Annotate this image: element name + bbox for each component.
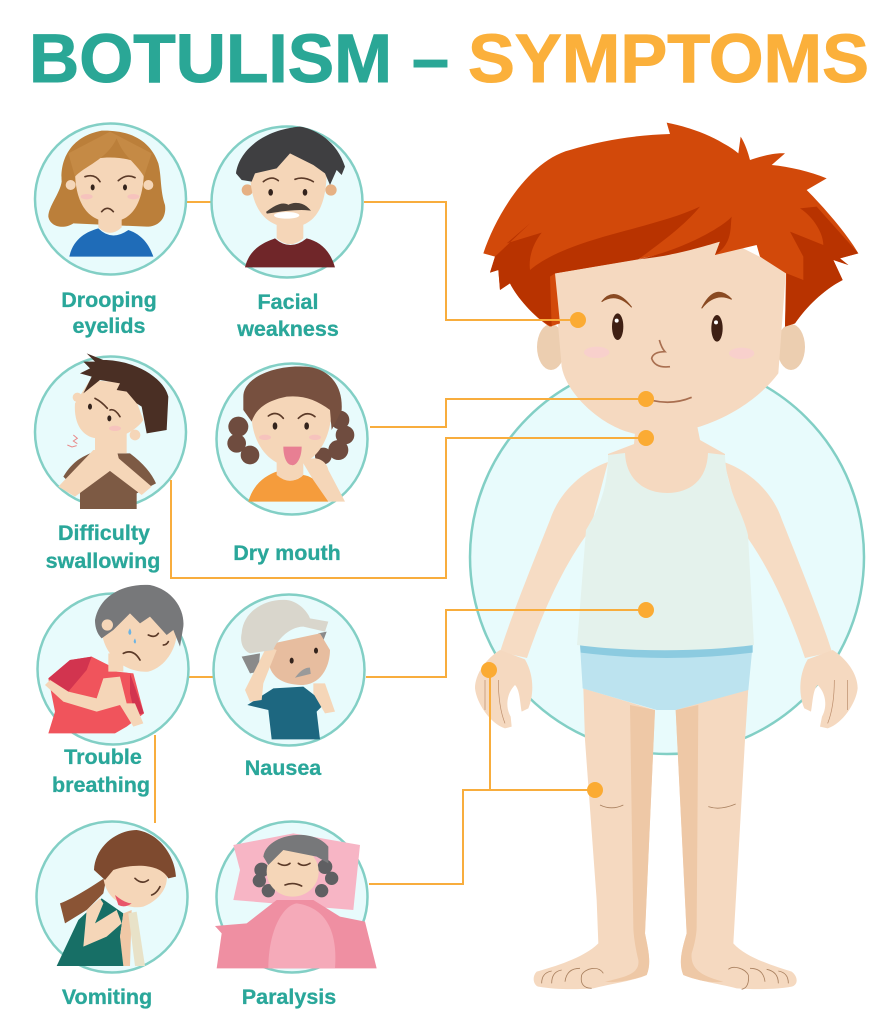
panel: difficulty swallowing — [35, 353, 186, 573]
label: Nausea — [245, 756, 322, 780]
symptom dots — [481, 312, 654, 798]
title: – — [412, 20, 449, 97]
underwear — [580, 644, 753, 710]
head and hair — [483, 123, 858, 435]
panel: vomiting — [36, 822, 188, 1009]
label: Dry mouth — [233, 541, 341, 565]
icon: man with facial weakness — [236, 127, 345, 267]
label: Trouble — [64, 745, 142, 769]
tank top — [577, 453, 754, 650]
body background circle — [470, 360, 864, 754]
title — [29, 20, 869, 97]
label: swallowing — [46, 549, 160, 573]
label: Drooping — [61, 288, 157, 312]
label: weakness — [236, 317, 339, 341]
title: BOTULISM — [29, 20, 392, 97]
left arm — [500, 462, 608, 658]
icon: girl vomiting — [57, 830, 176, 966]
icon: man with nausea — [241, 600, 335, 739]
connector lines — [155, 202, 645, 884]
panel: dry mouth — [216, 364, 368, 565]
icon: woman with drooping eyelids — [48, 131, 165, 257]
label: Paralysis — [242, 985, 336, 1009]
panel: paralysis — [215, 822, 377, 1009]
face — [584, 292, 754, 402]
label: breathing — [52, 773, 150, 797]
panel: facial weakness — [212, 126, 362, 341]
icon: boy with difficulty swallowing — [58, 353, 168, 509]
right arm — [724, 462, 832, 658]
boy figure — [470, 123, 864, 989]
label: eyelids — [73, 314, 145, 338]
icon: woman in bed with paralysis — [215, 833, 377, 968]
label: Facial — [258, 290, 318, 314]
label: Difficulty — [58, 521, 150, 545]
ears — [537, 324, 805, 370]
panel: drooping eyelids — [35, 124, 186, 338]
label: Vomiting — [62, 985, 152, 1009]
icon: man with trouble breathing — [45, 585, 183, 733]
panel: trouble breathing — [38, 585, 188, 797]
legs and hands — [475, 650, 858, 989]
title: SYMPTOMS — [468, 20, 869, 97]
icon: woman with dry mouth — [227, 367, 354, 502]
neck and chest — [608, 420, 725, 505]
panel: nausea — [214, 594, 364, 780]
